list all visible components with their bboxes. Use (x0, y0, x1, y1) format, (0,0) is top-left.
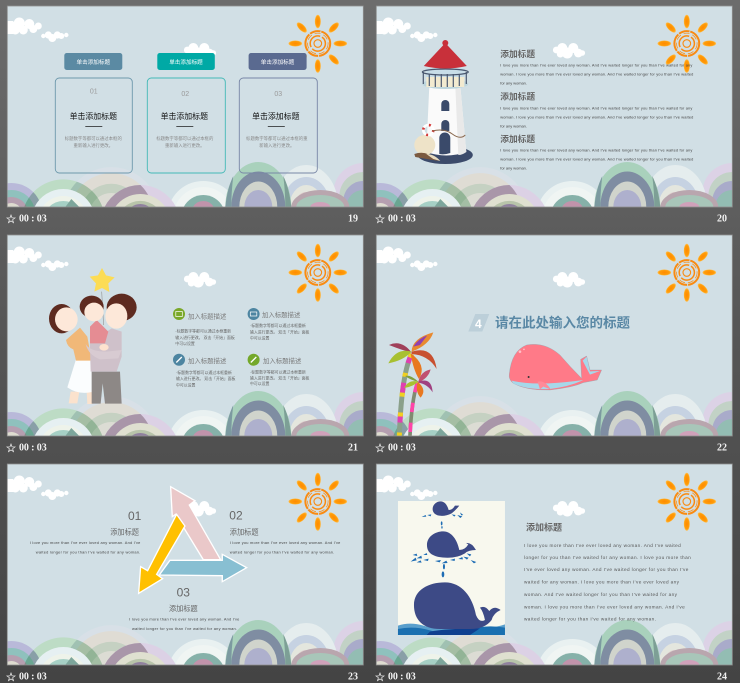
footer slide 20 (376, 214, 727, 224)
text block 3: woman. I love you more than I've ever loved any woman. And I've waited longer for you than I've waited (500, 156, 693, 162)
family illustration (49, 268, 137, 404)
yellow arrow (139, 514, 185, 593)
footer slide 23: 23 (348, 672, 358, 682)
paragraph: woman. And I've waited longer for you than I've waited for any (524, 592, 678, 597)
card 03: 03 (274, 91, 282, 98)
background sky and clouds (376, 6, 732, 207)
text 03: waited longer for you than I've waited for any woman. (132, 626, 237, 631)
background sky and clouds (7, 6, 363, 207)
item 4: 中可以设置 (250, 381, 270, 386)
item 4 (248, 354, 310, 386)
footer slide 19: 00 : 03 (19, 214, 47, 224)
hills (376, 391, 732, 436)
footer slide 21: 00 : 03 (19, 442, 47, 454)
footer slide 22 (376, 442, 727, 454)
pink whale (509, 344, 602, 390)
card 01: 标题数字等都可以通过本框的 (65, 135, 122, 142)
text 03: 03 (177, 586, 190, 600)
item 2: 中可以设置 (250, 336, 270, 340)
footer slide 24: 00 : 03 (388, 672, 416, 682)
hills (7, 162, 363, 207)
palm trees (388, 332, 437, 436)
text 03: 添加标题 (169, 604, 198, 613)
item 1: 输入进行更改。 双击「开始」面板 (175, 335, 235, 340)
slide border (7, 464, 363, 665)
hills (7, 391, 363, 436)
card 02: 重新输入进行更改。 (165, 142, 205, 149)
paragraph: waited longer for you than I've waited for any woman. (524, 616, 656, 622)
pink arrow (171, 487, 221, 560)
hills (7, 620, 363, 665)
text block 3 (500, 133, 693, 170)
lighthouse illustration (414, 40, 473, 164)
item 3: 加入标题描述 (188, 356, 227, 365)
sun (658, 473, 716, 531)
text block 1 (500, 48, 693, 86)
text block 2: 添加标题 (500, 90, 535, 102)
sun (288, 473, 347, 531)
slide border (376, 235, 732, 436)
text 01 (30, 509, 142, 554)
slide 23: triangle arrows (7, 464, 363, 665)
text 02: 添加标题 (230, 528, 259, 536)
item 2: 输入进行更改。 双击「开始」面板 (250, 330, 310, 334)
text block 1: for any woman. (500, 80, 527, 86)
paragraph: I've ever loved any woman. And I've waited longer for you than I've (524, 567, 689, 572)
text block 3: for any woman. (500, 166, 527, 170)
section number: 4 (475, 317, 482, 331)
text 02 (229, 508, 340, 554)
button 1: 单击添加标题 (77, 58, 110, 66)
card 01 (55, 78, 132, 173)
footer slide 20: 20 (717, 214, 727, 224)
item 3: ·标题数字等都可以通过本框重新 (176, 370, 232, 375)
card 03: 新输入进行更改。 (259, 142, 294, 149)
sun (288, 15, 347, 73)
slide border (7, 6, 363, 207)
card 02: 02 (181, 91, 189, 98)
text block 2: for any woman. (500, 124, 527, 128)
sun (658, 15, 716, 73)
item 3: 输入进行更改。 双击「开始」面板 (176, 376, 236, 381)
footer slide 23: 00 : 03 (19, 672, 47, 682)
text block 2 (500, 90, 693, 128)
background sky and clouds (376, 464, 732, 665)
text 02: waited longer for you than I've waited for any woman. (230, 550, 334, 554)
paragraph: waited for any woman. I love you more than I've ever loved any (524, 580, 680, 584)
slide 20: lighthouse (376, 6, 732, 207)
text 02: 02 (229, 508, 243, 522)
section title: 请在此处输入您的标题 (495, 314, 630, 330)
footer slide 23 (7, 672, 358, 682)
footer slide 19: 19 (348, 214, 358, 224)
text block 3: 添加标题 (500, 133, 535, 144)
item 1: ·标题数字等都可以通过本框重新 (175, 328, 231, 334)
background sky and clouds (7, 464, 363, 665)
item 2 (248, 308, 310, 340)
slide border (376, 464, 732, 665)
section number (468, 314, 489, 332)
whale picture (398, 501, 505, 635)
sun (288, 244, 347, 302)
paragraph: woman. I love you more than I've ever loved any woman. And I've (524, 604, 685, 610)
background sky and clouds (7, 235, 363, 436)
title: 添加标题 (526, 522, 562, 532)
slide 22: section title (376, 235, 732, 436)
item 3: 中可以设置 (176, 382, 196, 388)
footer slide 22: 00 : 03 (388, 442, 416, 454)
footer slide 22: 22 (717, 442, 727, 454)
item 4: 加入标题描述 (263, 356, 302, 365)
slide border (7, 235, 363, 436)
card 02: 单击添加标题 (161, 111, 208, 121)
footer slide 19 (7, 214, 358, 224)
paragraph: I love you more than I've ever loved any woman. And I've waited (524, 543, 681, 548)
item 1: 加入标题描述 (188, 312, 227, 320)
card 02 (147, 78, 225, 173)
text block 1: woman. I love you more than I've ever loved any woman. And I've waited longer for you than I've waited (500, 72, 693, 76)
text 01: waited longer for you than I've waited for any woman. (36, 550, 140, 554)
text block 2: I love you more than I've ever loved any woman. And I've waited longer for you than I've waited for any (500, 106, 692, 110)
text block 3: I love you more than I've ever loved any woman. And I've waited longer for you than I've waited for any (500, 148, 692, 152)
item 2: ·标题数字等都可以通过本框重新 (250, 323, 306, 328)
card 03 (239, 78, 317, 173)
background sky and clouds (376, 235, 732, 436)
sun (658, 244, 716, 302)
item 4: 输入进行更改。 双击「开始」面板 (250, 376, 310, 380)
footer slide 20: 00 : 03 (388, 214, 416, 224)
footer slide 21: 21 (348, 442, 358, 454)
blue arrow (159, 554, 247, 582)
text 02: I love you more than I've ever loved any woman. And I've (230, 540, 340, 545)
text 03 (129, 586, 239, 631)
card 03: 单击添加标题 (252, 111, 300, 121)
button 2: 单击添加标题 (169, 58, 203, 66)
text 01: 添加标题 (110, 528, 139, 536)
slide border (376, 6, 732, 207)
text block 1: I love you more than I've ever loved any woman. And I've waited longer for you than I've waited for any (500, 62, 692, 68)
button 3 (249, 53, 307, 70)
button 3: 单击添加标题 (261, 58, 295, 66)
paragraph: longer for you than I've waited for any woman. I love you more than (524, 555, 691, 560)
item 4: ·标题数字等都可以通过本框重新 (250, 370, 306, 374)
hills (376, 620, 732, 665)
text 01: I love you more than I've ever loved any woman. And I've (30, 540, 140, 545)
card 01: 单击添加标题 (70, 111, 117, 121)
triangle of arrows (139, 487, 247, 593)
card 01: 01 (90, 89, 98, 96)
item 1 (173, 308, 235, 346)
card 03: 标题数字等都可以通过本框的重 (246, 135, 308, 142)
text block 1: 添加标题 (500, 48, 535, 59)
text block 2: woman. I love you more than I've ever loved any woman. And I've waited longer for you than I've waited (500, 114, 693, 120)
card 01: 重新输入进行更改。 (74, 142, 113, 149)
slide 21: family (7, 235, 363, 436)
paragraph (524, 543, 691, 622)
button 2 (157, 53, 215, 70)
text 03: I love you more than I've ever loved any woman. And I've (129, 616, 239, 622)
item 2: 加入标题描述 (262, 310, 301, 319)
card 02: 标题数字等都可以通过本框的 (156, 135, 214, 142)
item 1: 中可以设置 (175, 341, 195, 346)
slide 19: three cards (7, 6, 363, 207)
item 3 (173, 354, 236, 388)
footer slide 21 (7, 442, 358, 454)
footer slide 24 (376, 672, 727, 682)
hills (376, 162, 732, 207)
footer slide 24: 24 (717, 672, 727, 682)
button 1 (64, 53, 122, 70)
slide 24: whales and text (376, 464, 732, 665)
text 01: 01 (128, 509, 142, 523)
